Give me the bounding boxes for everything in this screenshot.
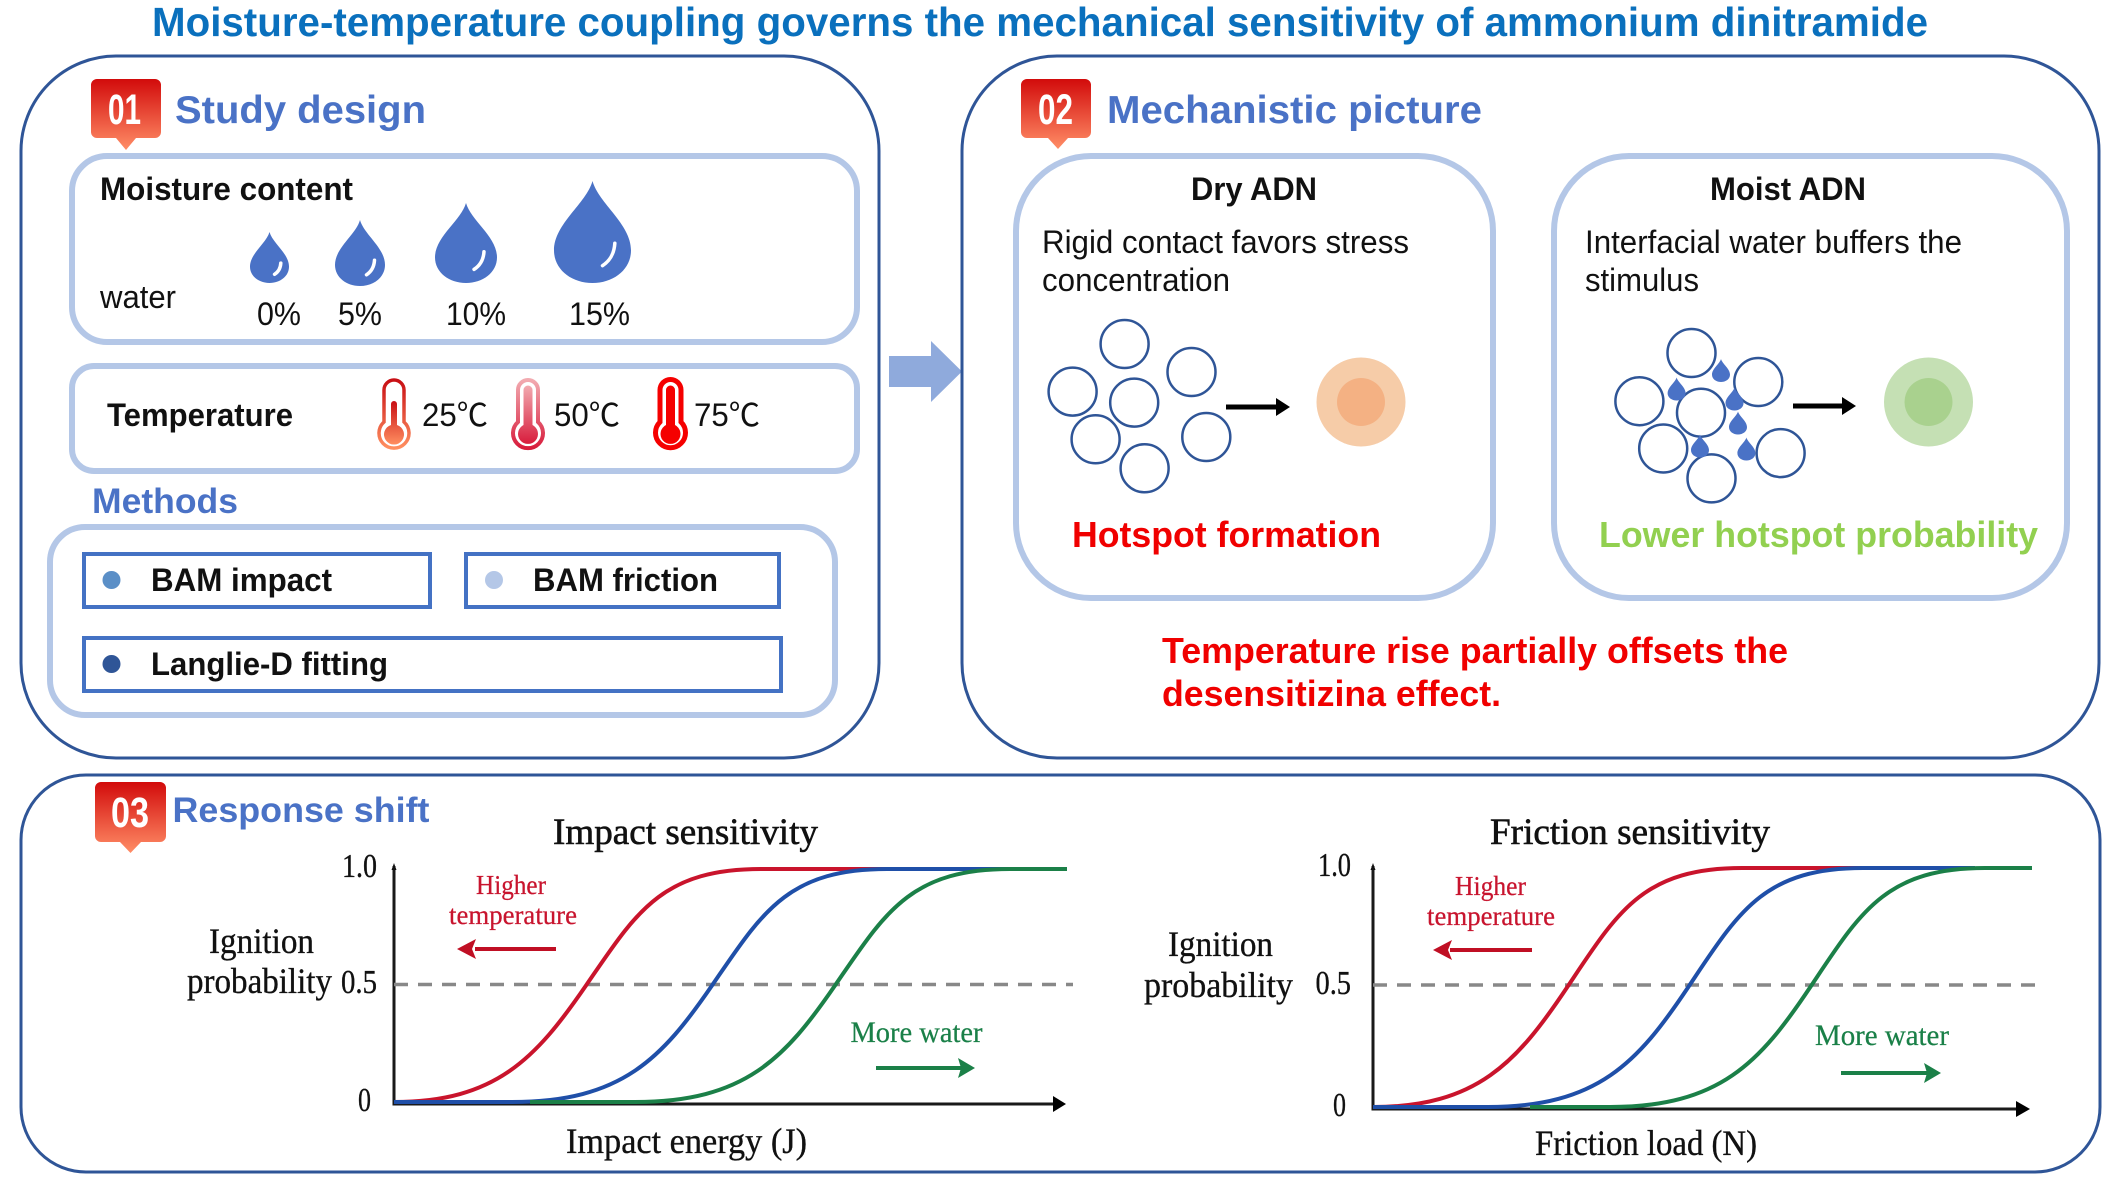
y axis label	[187, 921, 332, 1001]
hotspot: dry	[1316, 358, 1406, 446]
y ticks: 1.0	[1318, 847, 1351, 884]
moisture levels: 15%	[569, 296, 630, 332]
conclusion text: Temperature rise partially offsets the	[1162, 630, 1788, 671]
annotation: higher temperature	[1427, 871, 1555, 960]
moist heading: Moist ADN	[1710, 171, 1866, 207]
panel: response shift	[21, 775, 2100, 1172]
badge 03	[95, 782, 166, 853]
heading: methods: Methods	[92, 482, 238, 521]
dry description: concentration	[1042, 262, 1230, 298]
method: BAM impact: BAM impact	[151, 562, 332, 598]
curve: red	[1373, 868, 1880, 1107]
y ticks	[1316, 847, 1351, 1124]
y ticks: 0.5	[1316, 965, 1351, 1002]
particles: moist	[1615, 329, 1805, 502]
annotation: higher temperature: Higher	[476, 870, 546, 900]
annotation: higher temperature	[449, 870, 577, 959]
y axis label	[1144, 924, 1293, 1005]
icon: water drop 15%	[554, 181, 631, 283]
y axis label: Ignition	[209, 921, 314, 961]
heading: mechanistic picture: Mechanistic picture	[1107, 89, 1482, 132]
x axis label: Impact energy (J)	[566, 1121, 807, 1161]
axes	[392, 863, 1066, 1112]
dry description: Rigid contact favors stress	[1042, 224, 1409, 260]
badge 01: 01	[108, 86, 141, 134]
icon: thermometer 50	[513, 380, 543, 448]
panel: mechanistic picture	[962, 56, 2099, 758]
annotation: more water	[1815, 1019, 1949, 1083]
heading: study design: Study design	[175, 89, 426, 132]
icon: water drop 10%	[435, 203, 497, 283]
y ticks	[341, 848, 377, 1119]
chart: impact sensitivity	[187, 812, 1073, 1161]
icon: thermometer 75	[656, 380, 686, 448]
method: Langlie-D fitting	[84, 638, 781, 691]
arrow: design to mechanism	[889, 341, 962, 402]
annotation: more water	[850, 1016, 983, 1078]
temperature heading: Temperature	[107, 397, 293, 433]
conclusion text	[1162, 630, 1788, 714]
y ticks: 0.5	[341, 964, 377, 1001]
temperature levels: 25℃	[422, 397, 488, 433]
badge 02	[1021, 79, 1091, 149]
y axis label: probability	[1144, 965, 1293, 1005]
dry description	[1042, 224, 1409, 298]
water droplets: moist	[1668, 359, 1755, 460]
particles: dry	[1049, 320, 1230, 492]
moisture levels: 0%	[257, 296, 301, 332]
annotation: higher temperature: Higher	[1455, 871, 1526, 901]
annotation: more water: More water	[850, 1016, 983, 1049]
curve: blue	[1373, 868, 1975, 1107]
moist description: stimulus	[1585, 262, 1699, 298]
moist description: Interfacial water buffers the	[1585, 224, 1962, 260]
method: BAM friction: BAM friction	[533, 562, 718, 598]
y axis label: Ignition	[1168, 924, 1273, 964]
box: methods	[50, 527, 835, 715]
y ticks: 0	[358, 1082, 371, 1119]
threshold line	[1373, 983, 2036, 987]
badge 03: 03	[111, 789, 149, 837]
curve: green	[530, 869, 1067, 1102]
annotation: more water: More water	[1815, 1019, 1949, 1052]
curve: blue	[394, 869, 1020, 1102]
y ticks: 1.0	[342, 848, 377, 885]
annotation: higher temperature: temperature	[449, 900, 577, 930]
arrow: dry	[1226, 398, 1290, 416]
chart: friction sensitivity	[1144, 812, 2036, 1163]
temperature levels: 50℃	[554, 397, 620, 433]
temperature levels	[422, 397, 760, 433]
axes	[1370, 863, 2030, 1117]
arrow: moist	[1793, 397, 1856, 415]
y axis label: probability	[187, 961, 332, 1001]
label: lower hotspot probability: Lower hotspot probability	[1599, 514, 2038, 555]
moist description	[1585, 224, 1962, 298]
moisture levels: 10%	[446, 296, 506, 332]
method: BAM impact	[84, 554, 430, 607]
hotspot: moist	[1884, 358, 1973, 446]
panel: study design	[21, 56, 879, 758]
method: Langlie-D fitting: Langlie-D fitting	[151, 646, 388, 682]
badge 02: 02	[1038, 86, 1073, 134]
method: BAM friction	[466, 554, 779, 607]
x axis label: Friction load (N)	[1535, 1123, 1757, 1163]
title: Moisture-temperature coupling governs the mechanical sensitivity of ammonium dinitramide	[152, 0, 1928, 45]
chart title: Impact sensitivity	[553, 812, 818, 853]
curve: green	[1530, 868, 2032, 1107]
box: moisture content	[72, 156, 857, 342]
card: moist ADN	[1554, 156, 2067, 598]
curve: red	[394, 869, 915, 1102]
temperature levels: 75℃	[694, 397, 760, 433]
water label: water	[99, 279, 176, 315]
moisture heading: Moisture content	[100, 171, 353, 207]
icon: water drop 0%	[250, 232, 289, 283]
moisture levels: 5%	[338, 296, 382, 332]
icon: thermometer 25	[379, 380, 409, 448]
annotation: higher temperature: temperature	[1427, 901, 1555, 931]
heading: response shift: Response shift	[172, 791, 430, 830]
moisture levels	[257, 296, 630, 332]
box: temperature	[72, 366, 857, 471]
chart title: Friction sensitivity	[1490, 812, 1771, 853]
y ticks: 0	[1333, 1087, 1346, 1124]
conclusion text: desensitizina effect.	[1162, 673, 1501, 714]
card: dry ADN	[1016, 156, 1493, 598]
label: hotspot formation: Hotspot formation	[1072, 514, 1381, 555]
badge 01	[91, 79, 161, 150]
icon: water drop 5%	[335, 220, 385, 286]
threshold line	[394, 983, 1073, 986]
dry heading: Dry ADN	[1191, 171, 1317, 207]
